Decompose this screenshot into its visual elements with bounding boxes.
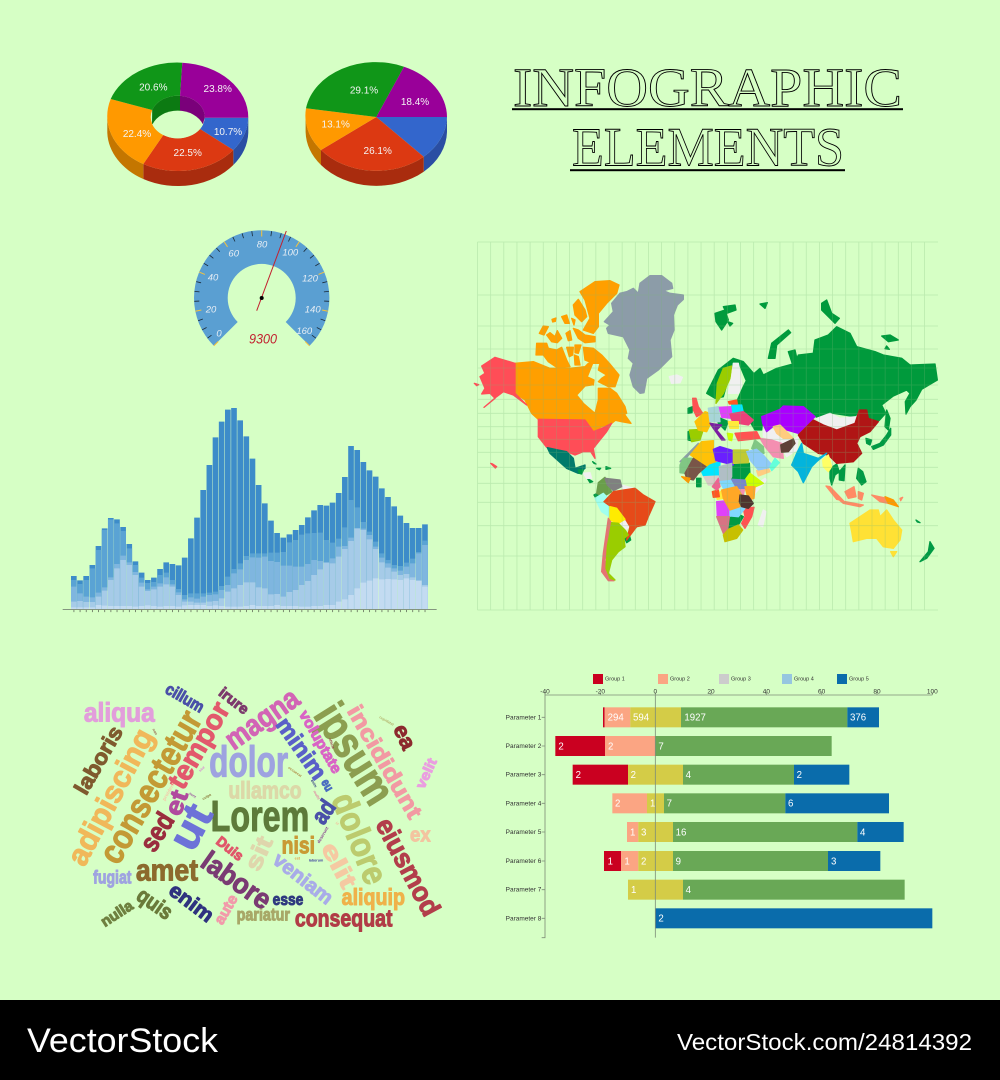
bar value labels: 2 <box>797 770 802 781</box>
chart: word cloud: aute <box>211 892 242 928</box>
chart: 3D pie: 13.1% <box>322 120 350 130</box>
chart: word cloud: irure <box>215 684 252 718</box>
bar value labels: 2 <box>576 770 581 781</box>
bar value labels: 9 <box>676 856 681 867</box>
chart: word cloud: sint <box>198 765 206 773</box>
axis labels: 0 <box>654 689 658 696</box>
chart: 3D donut: 22.5% <box>174 148 202 159</box>
bar value labels: 3 <box>641 827 646 838</box>
bar value labels: 2 <box>641 856 646 867</box>
chart: word cloud: veniam <box>268 849 337 909</box>
chart: word cloud: incididunt <box>342 700 428 823</box>
footer bar: VectorStock.com/24814392 <box>677 1029 972 1055</box>
chart: word cloud: enim <box>164 879 218 927</box>
bar value labels: 2 <box>608 741 613 752</box>
legend: Group 3 <box>731 677 751 683</box>
legend: Group 5 <box>849 677 869 683</box>
axis labels: 40 <box>763 689 770 696</box>
chart: word cloud: ex <box>410 824 431 847</box>
chart: word cloud: aliqua <box>84 698 155 728</box>
chart: 3D pie: 26.1% <box>364 146 392 157</box>
chart: word cloud <box>60 679 447 933</box>
chart: word cloud: est <box>295 856 301 860</box>
chart: 3D donut: 20.6% <box>139 82 168 94</box>
chart: word cloud: pariatur <box>237 905 290 925</box>
bar value labels: 1927 <box>684 713 706 724</box>
axis labels: Parameter 3 <box>506 772 542 779</box>
gauge: speedometer: 80 <box>257 239 268 250</box>
bar value labels: 6 <box>788 799 793 810</box>
bar value labels: 1 <box>631 885 636 896</box>
map: world <box>474 242 938 610</box>
chart: word cloud: sunt <box>188 791 197 800</box>
axis labels: Parameter 2 <box>506 743 542 750</box>
axis labels <box>506 689 938 922</box>
chart: word cloud: ipsum <box>304 693 406 814</box>
map: Europe, Africa, Asia, Oceania <box>680 300 937 562</box>
chart: word cloud: minim <box>271 712 332 785</box>
chart: diverging stacked bars <box>506 674 938 938</box>
chart: word cloud: voluptate <box>295 707 345 777</box>
chart: word cloud: labore <box>195 845 277 916</box>
bar value labels: 1 <box>650 799 655 810</box>
chart: word cloud: et <box>159 786 194 819</box>
chart: word cloud: non <box>151 728 158 736</box>
chart: word cloud: laboris <box>69 721 128 799</box>
legend <box>593 674 869 684</box>
gauge: speedometer: 0 <box>216 328 222 340</box>
bar value labels <box>558 713 866 925</box>
bar value labels: 2 <box>658 914 664 925</box>
axis labels: -40 <box>540 689 550 696</box>
legend: Group 1 <box>605 677 625 683</box>
chart: 3D donut <box>107 63 248 186</box>
chart: word cloud: ad <box>306 795 342 829</box>
bar value labels: 4 <box>686 885 692 896</box>
bar value labels: 4 <box>686 770 692 781</box>
axis labels: Parameter 5 <box>506 829 542 836</box>
gauge: speedometer: 100 <box>282 248 299 259</box>
chart: word cloud: fugiat <box>93 866 131 887</box>
chart: 3D donut: 23.8% <box>204 84 232 95</box>
footer bar: VectorStock <box>27 1022 219 1060</box>
bar value labels: 1 <box>624 856 630 867</box>
bar value labels: 594 <box>633 713 650 724</box>
chart: word cloud: cillum <box>162 679 208 717</box>
map: Americas <box>474 276 683 581</box>
gauge: speedometer: 120 <box>302 273 319 284</box>
chart: word cloud: ullamco <box>228 777 302 804</box>
chart: word cloud: cupidatat <box>378 715 395 727</box>
chart: word cloud: sed <box>133 807 180 857</box>
gauge: speedometer: 20 <box>205 304 217 315</box>
chart: word cloud: Lorem <box>211 792 309 841</box>
chart: word cloud: mollit <box>312 790 321 801</box>
axis labels: Parameter 7 <box>506 887 542 894</box>
bar value labels: 7 <box>667 799 672 810</box>
chart: word cloud: sit <box>240 832 279 875</box>
bar value labels: 2 <box>615 799 620 810</box>
chart: word cloud: Duis <box>213 833 247 864</box>
chart: word cloud: ea <box>388 720 422 754</box>
chart: word cloud: quis <box>132 882 178 925</box>
axis labels: 80 <box>873 689 881 696</box>
bar value labels: 1 <box>630 827 635 838</box>
title <box>512 57 903 178</box>
chart: stacked columns <box>63 408 437 611</box>
title: ELEMENTS <box>572 116 844 178</box>
chart: 3D pie: 18.4% <box>401 97 429 108</box>
chart: word cloud: officia <box>328 738 335 750</box>
bar value labels: 294 <box>608 713 624 724</box>
gauge: speedometer: 60 <box>228 249 240 260</box>
chart: word cloud: anim <box>310 779 318 789</box>
chart: word cloud: id <box>335 821 340 826</box>
chart: 3D donut: 10.7% <box>214 127 242 138</box>
gauge: speedometer: 160 <box>296 326 313 337</box>
gauge: speedometer <box>194 230 329 346</box>
legend: Group 2 <box>670 677 690 683</box>
chart: word cloud: tempor <box>162 696 237 795</box>
legend: Group 4 <box>794 677 814 683</box>
chart: word cloud: velit <box>412 755 440 791</box>
chart: word cloud: elit <box>315 838 362 893</box>
bar value labels: 2 <box>631 770 636 781</box>
chart: word cloud: magna <box>219 682 306 757</box>
chart: 3D pie: 29.1% <box>350 86 378 96</box>
axis labels: Parameter 6 <box>506 858 542 865</box>
chart: word cloud: nisi <box>282 832 315 859</box>
chart: word cloud: deserunt <box>316 825 330 844</box>
axes <box>542 692 932 938</box>
gauge: speedometer: 40 <box>208 272 219 283</box>
axis labels: -20 <box>596 689 605 696</box>
footer bar <box>0 1000 1000 1080</box>
bar value labels: 2 <box>558 741 564 752</box>
chart: 3D pie <box>305 62 447 186</box>
chart: word cloud: occaecat <box>287 766 303 778</box>
gauge: speedometer: 9300 <box>249 330 277 346</box>
axis labels: Parameter 4 <box>506 800 542 807</box>
chart: word cloud: amet <box>136 854 198 888</box>
axis labels: Parameter 1 <box>506 714 542 721</box>
axis labels: 20 <box>707 689 715 696</box>
chart: word cloud: nulla <box>98 897 137 931</box>
bar value labels: 1 <box>608 856 613 867</box>
bar value labels: 3 <box>831 856 836 867</box>
chart: word cloud: ut <box>159 796 223 858</box>
chart: word cloud: esse <box>273 890 303 909</box>
chart: word cloud: consectetur <box>91 703 210 870</box>
chart: word cloud: dolore <box>323 787 395 890</box>
bar value labels: 4 <box>860 827 866 838</box>
bar value labels: 16 <box>676 827 686 838</box>
bar value labels: 376 <box>850 713 866 724</box>
chart: word cloud: eu <box>318 777 336 794</box>
axis labels: Parameter 8 <box>506 915 542 922</box>
title: INFOGRAPHIC <box>513 57 902 118</box>
chart: word cloud: proident <box>161 782 177 802</box>
bars <box>555 707 932 928</box>
bar value labels: 7 <box>658 741 664 752</box>
chart: word cloud: culpa <box>202 792 213 801</box>
gauge: speedometer: 140 <box>305 304 321 315</box>
chart: 3D donut: 22.4% <box>123 129 151 140</box>
chart: word cloud: eiusmod <box>370 812 447 921</box>
axis labels: 60 <box>818 689 826 696</box>
chart: word cloud: consequat <box>295 906 393 933</box>
chart: word cloud: adipiscing <box>60 723 161 871</box>
axis labels: 100 <box>927 689 938 696</box>
chart: word cloud: aliquip <box>342 884 405 910</box>
chart: word cloud: dolor <box>209 739 288 787</box>
chart: word cloud: laborum <box>309 858 324 862</box>
